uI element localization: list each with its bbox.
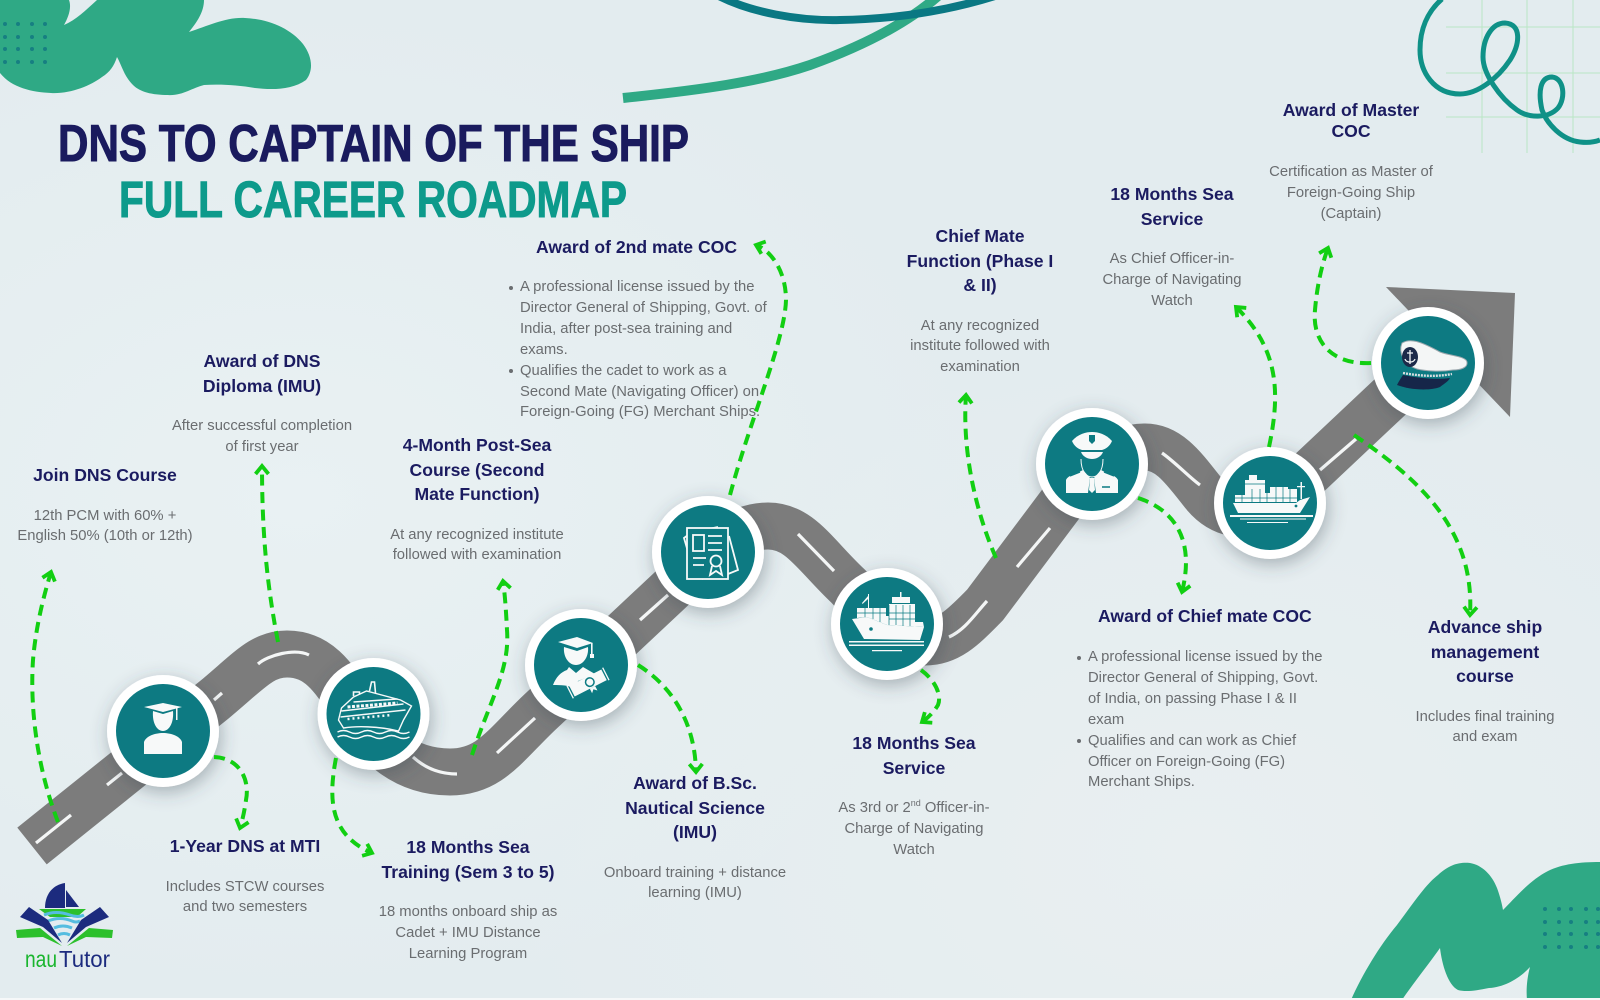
text block: Chief Mate Function — [907, 226, 1053, 375]
text block: 1-Year DNS at MTI: 1-Year DNS at MTI — [170, 836, 320, 856]
text block: 18 Months Sea Training: Cadet + IMU Distance — [395, 925, 541, 941]
text block: Advance ship management course: Advance ship — [1428, 617, 1542, 637]
text block: Award of 2nd mate COC: India, after post-sea training and — [520, 321, 732, 337]
icon: graduate with scroll — [553, 637, 611, 702]
text block: 18 Months Sea Service officer: 18 Months Sea — [852, 733, 976, 753]
arrow: to Advance ship management course — [1354, 435, 1470, 615]
decorative blob: top left — [0, 0, 311, 95]
text block: 18 Months Sea Training: 18 Months Sea — [406, 837, 530, 857]
text block: Award of Chief mate COC: Merchant Ships. — [1088, 774, 1195, 790]
text block: Award of Chief mate COC: Officer on Foreign-Going (FG) — [1088, 754, 1285, 770]
step marker 2: cruise ship — [318, 658, 430, 770]
text block: 18 Months Sea Service chief officer: 18 Months Sea — [1110, 184, 1234, 204]
text block: Award of 2nd mate COC: exams. — [520, 342, 568, 358]
text block: Join DNS Course: 12th PCM with 60% + — [34, 508, 176, 524]
text block: 4-Month Post-Sea Course: Course (Second — [410, 460, 544, 480]
text block: Chief Mate Function: Chief Mate — [936, 226, 1024, 246]
text block: Join DNS Course: Join DNS Course — [33, 465, 177, 485]
text block: Join DNS Course — [17, 465, 193, 544]
text block: Award of Chief mate COC — [1077, 606, 1322, 790]
text block: Award of Master COC: Foreign-Going Ship — [1287, 185, 1415, 201]
text block: Chief Mate Function: & II) — [963, 275, 997, 295]
text block: Award of DNS Diploma: of first year — [225, 439, 299, 455]
title — [58, 115, 689, 228]
text block: Join DNS Course: English 50% (10th or 12th) — [17, 528, 193, 544]
arrow: to 4-Month Post-Sea Course — [472, 581, 507, 755]
logo: nauTutor — [16, 883, 113, 972]
text block: Award of BSc Nautical Science: Nautical Science — [625, 798, 765, 818]
step marker 6: officer — [1036, 408, 1148, 520]
text block: Advance ship management course: Includes final training — [1415, 708, 1554, 724]
step marker 7: cargo ship — [1214, 447, 1326, 559]
text block: Award of Master COC: (Captain) — [1321, 206, 1381, 222]
text block: Award of Master COC: Certification as Master of — [1269, 164, 1433, 180]
text block: Award of BSc Nautical Science: learning (IMU) — [648, 885, 742, 901]
text block: Award of 2nd mate COC: Second Mate (Navigating Officer) on — [520, 384, 759, 400]
title: DNS TO CAPTAIN OF THE SHIP — [58, 115, 689, 173]
text block: 18 Months Sea Training: 18 months onboard ship as — [379, 904, 557, 920]
text block: 18 Months Sea Training: Training (Sem 3 to 5) — [381, 862, 555, 882]
text block: Award of 2nd mate COC: Award of 2nd mate COC — [536, 237, 737, 257]
arrow: to 1-Year DNS at MTI — [214, 757, 247, 828]
step marker 1: graduate — [107, 675, 219, 787]
text block: Award of Chief mate COC: of India, on passing Phase I & II — [1088, 691, 1297, 707]
title: FULL CAREER ROADMAP — [119, 171, 627, 228]
text block: Chief Mate Function: Function (Phase I — [907, 250, 1053, 270]
logo: nauTutor: Tutor — [59, 946, 110, 972]
text block: 4-Month Post-Sea Course: At any recognized institute — [390, 526, 564, 542]
text block: 18 Months Sea Training: Learning Program — [409, 946, 527, 962]
text block: 18 Months Sea Service officer: Charge of Navigating — [844, 821, 984, 837]
arrow: to Join DNS Course — [32, 572, 58, 822]
text block: Award of BSc Nautical Science — [604, 773, 786, 901]
icon: officer — [1066, 432, 1118, 493]
text block: 18 Months Sea Service chief officer — [1102, 184, 1242, 309]
icon: cargo ship — [849, 592, 924, 651]
text block: 18 Months Sea Service chief officer: Watch — [1151, 293, 1193, 309]
text block: Award of BSc Nautical Science: (IMU) — [673, 822, 717, 842]
icon: cargo ship — [1230, 475, 1313, 523]
text block: Award of Chief mate COC: Qualifies and can work as Chief — [1088, 733, 1296, 749]
text block: 18 Months Sea Service officer: Service — [883, 758, 945, 778]
text block: 4-Month Post-Sea Course — [390, 435, 564, 563]
text block: Award of Master COC — [1269, 100, 1433, 222]
arrow: to Award of DNS Diploma — [262, 466, 278, 642]
text block: Award of Chief mate COC: Director General of Shipping, Govt. — [1088, 670, 1318, 686]
text block: 1-Year DNS at MTI — [166, 836, 324, 915]
text block: Award of 2nd mate COC: A professional license issued by the — [520, 279, 754, 295]
arrow: to Award of BSc — [638, 665, 696, 772]
icon: certificate — [684, 527, 738, 579]
text block: Award of 2nd mate COC: Director General of Shipping, Govt. of — [520, 300, 767, 316]
text block: 18 Months Sea Service officer: As 3rd or 2nd Officer-in- — [838, 798, 990, 816]
arrow: to Award of 2nd mate COC — [730, 245, 786, 495]
icon: captain hat — [1397, 341, 1467, 389]
icon: cruise ship — [338, 682, 412, 738]
text block: Chief Mate Function: institute followed with — [910, 338, 1050, 354]
text block: Award of Chief mate COC: exam — [1088, 712, 1124, 728]
text block: 18 Months Sea Training — [379, 837, 557, 962]
decorative blob: bottom right — [1351, 862, 1600, 1000]
text block: Award of Master COC: COC — [1331, 121, 1371, 141]
decorative curves: top centre — [623, 0, 995, 98]
text block: Award of Master COC: Award of Master — [1283, 100, 1419, 120]
decorative spiral and grid: top right — [1420, 0, 1600, 153]
text block: Advance ship management course — [1415, 617, 1554, 745]
text block: Award of 2nd mate COC — [509, 237, 767, 420]
logo: nauTutor: nau — [25, 946, 57, 972]
text block: Advance ship management course: course — [1456, 666, 1514, 686]
text block: Award of DNS Diploma — [172, 351, 352, 455]
text block: 18 Months Sea Service chief officer: Service — [1141, 208, 1203, 228]
arrow: to 18 Months Sea Service (chief officer) — [1236, 307, 1275, 447]
text block: 4-Month Post-Sea Course: Mate Function) — [414, 484, 540, 504]
step marker 4: certificate — [652, 496, 764, 608]
text block: Award of Chief mate COC: A professional license issued by the — [1088, 649, 1322, 665]
text block: 1-Year DNS at MTI: and two semesters — [183, 899, 307, 915]
text block: Award of DNS Diploma: Diploma (IMU) — [203, 376, 321, 396]
text block: Chief Mate Function: examination — [940, 359, 1020, 375]
step marker 5: cargo ship — [831, 568, 943, 680]
text block: 1-Year DNS at MTI: Includes STCW courses — [166, 878, 324, 894]
text block: 4-Month Post-Sea Course: followed with examination — [393, 547, 561, 563]
text block: Award of Chief mate COC: Award of Chief mate COC — [1098, 606, 1312, 626]
arrow: to 18 Months Sea Service (officer) — [921, 670, 939, 722]
text block: 18 Months Sea Service chief officer: Charge of Navigating — [1102, 272, 1242, 288]
text block: Award of BSc Nautical Science: Onboard training + distance — [604, 864, 786, 880]
text block: Chief Mate Function: At any recognized — [921, 318, 1039, 334]
arrow: to 18 Months Sea Training — [332, 758, 372, 853]
text block: 4-Month Post-Sea Course: 4-Month Post-Sea — [403, 435, 551, 455]
step marker 8: captain hat — [1372, 307, 1484, 419]
icon: graduate — [144, 703, 182, 754]
text block: Award of DNS Diploma: Award of DNS — [204, 351, 320, 371]
road with arrowhead — [32, 287, 1515, 846]
text block: 18 Months Sea Service officer: Watch — [893, 842, 935, 858]
text block: Award of BSc Nautical Science: Award of B.Sc. — [633, 773, 757, 793]
step marker 3: graduate with scroll — [525, 609, 637, 721]
text block: Award of 2nd mate COC: Foreign-Going (FG) Merchant Ships. — [520, 404, 760, 420]
text block: 18 Months Sea Service chief officer: As Chief Officer-in- — [1110, 251, 1234, 267]
text block: Award of DNS Diploma: After successful completion — [172, 418, 352, 434]
white bottom edge — [0, 998, 1600, 1000]
arrow: to Chief Mate Function — [965, 395, 996, 558]
text block: Advance ship management course: management — [1431, 642, 1539, 662]
text block: Advance ship management course: and exam — [1452, 729, 1517, 745]
text block: 18 Months Sea Service officer — [838, 733, 990, 858]
text block: Award of 2nd mate COC: Qualifies the cadet to work as a — [520, 363, 726, 379]
arrow: to Award of Master COC — [1315, 248, 1371, 363]
arrow: to Award of Chief mate COC — [1138, 498, 1186, 592]
